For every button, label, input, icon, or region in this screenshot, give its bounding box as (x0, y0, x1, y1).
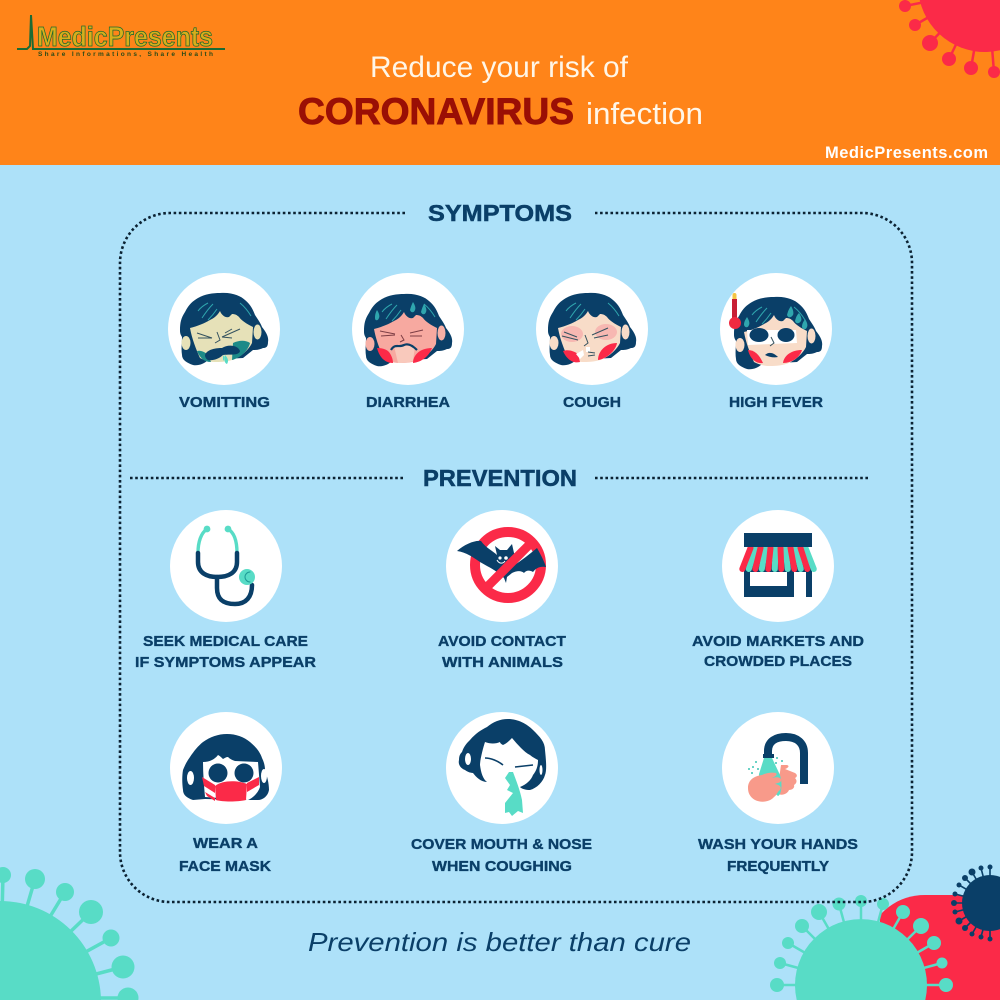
icon: cough face (548, 293, 636, 365)
icon: no bat (457, 532, 546, 598)
prevention: avoid contact with animals: WITH ANIMALS (442, 654, 563, 671)
icon: market stall (742, 533, 814, 597)
icon: navy virus bottom right (951, 864, 1000, 942)
logo: MedicPresents: Share Informations, Share Health (38, 51, 213, 58)
logo: MedicPresents (17, 15, 225, 58)
symptom: high fever (720, 273, 832, 411)
prevention: wash your hands: FREQUENTLY (727, 858, 829, 875)
symptom: high fever: HIGH FEVER (729, 394, 823, 411)
prevention: avoid markets and crowded places (692, 510, 864, 670)
dotted frame (120, 213, 912, 902)
icon: red blob bottom right (880, 895, 1000, 1000)
prevention: avoid markets and crowded places: CROWDED PLACES (704, 653, 852, 670)
heading: symptoms: SYMPTOMS (428, 200, 572, 226)
title: Reduce your risk of (370, 51, 629, 84)
symptom: vomitting: VOMITTING (179, 394, 270, 411)
prevention: cover mouth and nose (411, 712, 592, 875)
prevention: cover mouth and nose: WHEN COUGHING (432, 858, 572, 875)
prevention: seek medical care: SEEK MEDICAL CARE (143, 633, 308, 650)
prevention: avoid contact with animals: AVOID CONTACT (438, 633, 566, 650)
symptom: diarrhea (352, 273, 464, 411)
prevention: wash your hands (698, 712, 858, 875)
header band (0, 0, 1000, 165)
logo: MedicPresents: MedicPresents (37, 21, 213, 52)
title (298, 51, 703, 132)
prevention: seek medical care: IF SYMPTOMS APPEAR (135, 654, 316, 671)
prevention: wear a face mask: WEAR A (193, 835, 258, 852)
icon: face with tissue (459, 719, 546, 816)
divider and heading: prevention: PREVENTION (423, 465, 577, 491)
prevention: wear a face mask (170, 712, 282, 875)
prevention: cover mouth and nose: COVER MOUTH & NOSE (411, 836, 592, 853)
symptom: diarrhea: DIARRHEA (366, 394, 450, 411)
icon: tap and hands (748, 737, 804, 802)
icon: fever face (734, 297, 822, 369)
prevention: wear a face mask: FACE MASK (179, 858, 271, 875)
title: CORONAVIRUS (298, 91, 574, 132)
symptom: vomitting (168, 273, 280, 411)
icon: vomitting face (180, 293, 268, 365)
prevention: avoid markets and crowded places: AVOID MARKETS AND (692, 633, 864, 650)
icon: teal virus bottom left (0, 867, 139, 1000)
tagline: Prevention is better than cure (308, 927, 691, 957)
symptom: cough (536, 273, 648, 411)
icon: thermometer (729, 293, 741, 329)
prevention: seek medical care (135, 510, 316, 671)
icon: stethoscope (198, 526, 255, 604)
title: infection (586, 96, 703, 131)
icon: masked face (182, 734, 269, 802)
symptom: cough: COUGH (563, 394, 621, 411)
website url: MedicPresents.com (825, 144, 988, 162)
prevention: avoid contact with animals (438, 510, 566, 671)
icon: red virus top right (899, 0, 1000, 78)
icon: teal virus bottom right (770, 895, 953, 1000)
icon: diarrhea face (364, 294, 452, 366)
prevention: wash your hands: WASH YOUR HANDS (698, 836, 858, 853)
